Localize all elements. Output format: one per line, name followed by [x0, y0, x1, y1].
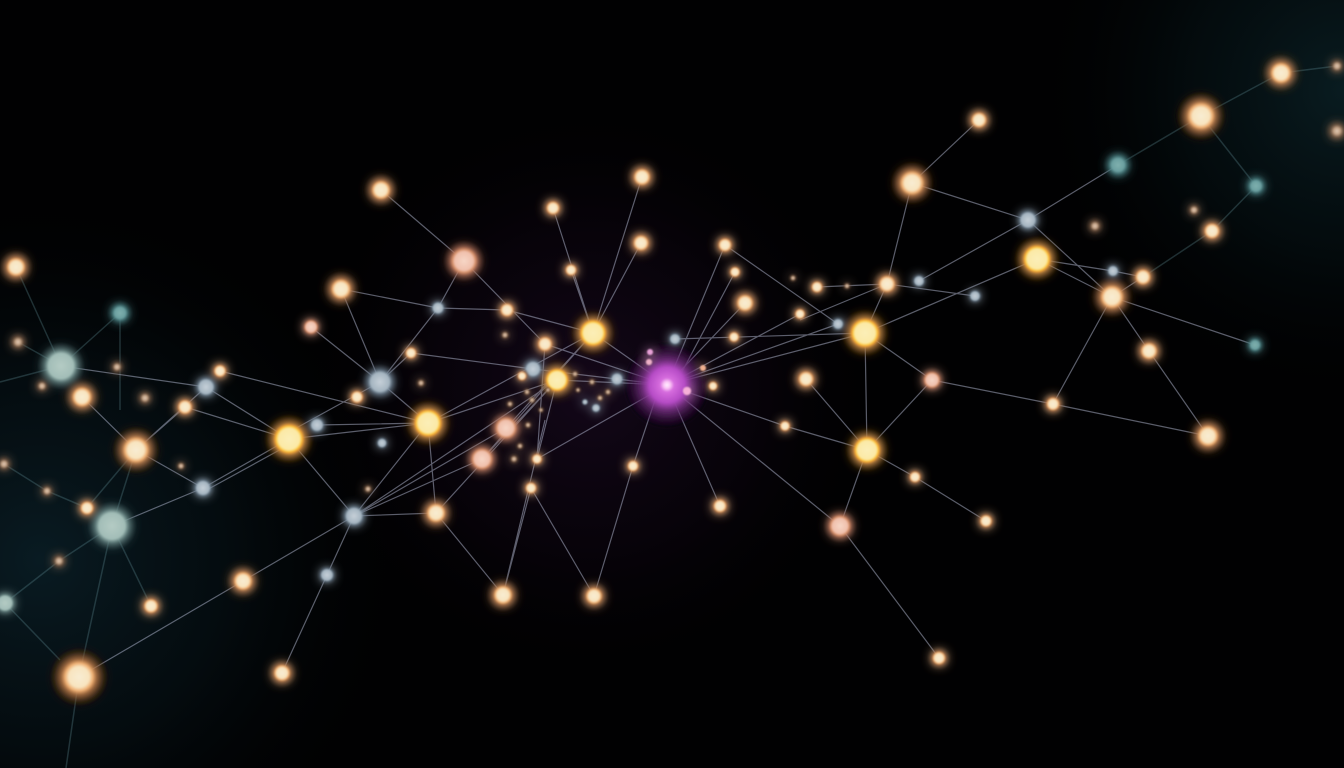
- nodes: far right cluster: [1014, 54, 1344, 455]
- connecting lines: main network: [61, 120, 1255, 677]
- node: magenta hub: [625, 343, 709, 427]
- nodes: left-centre cluster: [172, 173, 485, 688]
- nodes: right-centre cluster: [667, 106, 997, 670]
- nodes: far left cluster: [0, 250, 187, 707]
- nodes: centre cluster: [465, 162, 732, 612]
